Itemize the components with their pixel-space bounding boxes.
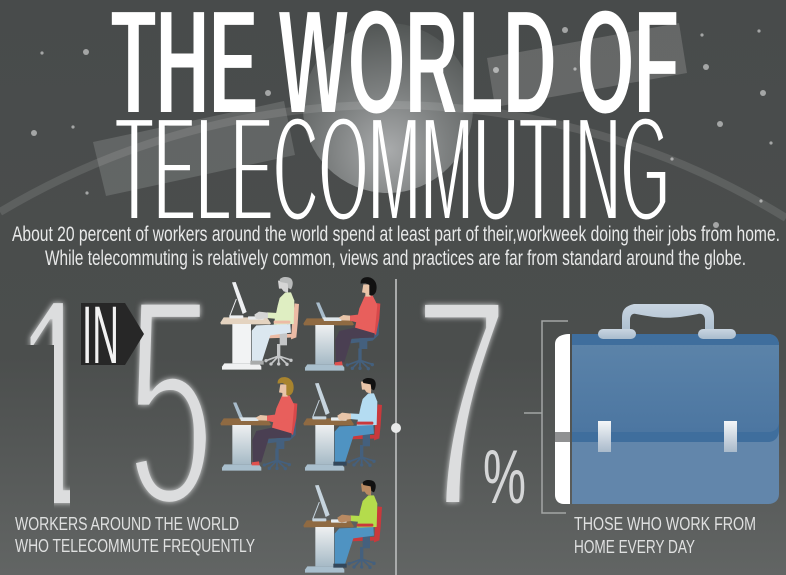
worker: man blue shirt <box>303 378 382 471</box>
worker: grey faded man <box>220 277 299 370</box>
planet globe <box>303 23 473 193</box>
home caption: HOME EVERY DAY <box>574 537 695 557</box>
starfield and planet backdrop <box>0 23 786 228</box>
satellite panel left <box>93 101 295 196</box>
divider line <box>391 279 401 575</box>
home caption <box>574 514 756 557</box>
worker: woman black hair <box>303 277 380 371</box>
big number 5: 5 <box>128 237 213 568</box>
big number 1: 1 <box>16 233 94 573</box>
handle feet <box>598 329 636 339</box>
flap <box>572 334 779 442</box>
worker: woman blonde hair <box>220 377 297 471</box>
percent sign: % <box>483 435 526 520</box>
buckle right <box>724 421 737 452</box>
blue body <box>572 334 779 504</box>
orbit arc <box>0 105 786 218</box>
buckle left <box>598 421 611 452</box>
workers caption: WHO TELECOMMUTE FREQUENTLY <box>15 536 255 556</box>
workers caption: WORKERS AROUND THE WORLD <box>15 514 239 534</box>
briefcase icon <box>555 304 779 504</box>
handle <box>622 304 714 336</box>
workers pictogram <box>220 277 382 573</box>
big number 7: 7 <box>416 236 508 571</box>
stat: 7 percent <box>416 236 526 571</box>
IN badge: IN <box>82 290 119 381</box>
workers caption <box>15 514 255 556</box>
bracket <box>524 321 568 513</box>
title <box>111 0 679 253</box>
white side <box>555 334 570 504</box>
satellite panel right <box>487 23 687 107</box>
worker: man green shirt <box>303 480 382 573</box>
stars <box>31 27 773 228</box>
stat: 1 in 5 <box>26 299 210 507</box>
intro text <box>12 223 780 270</box>
